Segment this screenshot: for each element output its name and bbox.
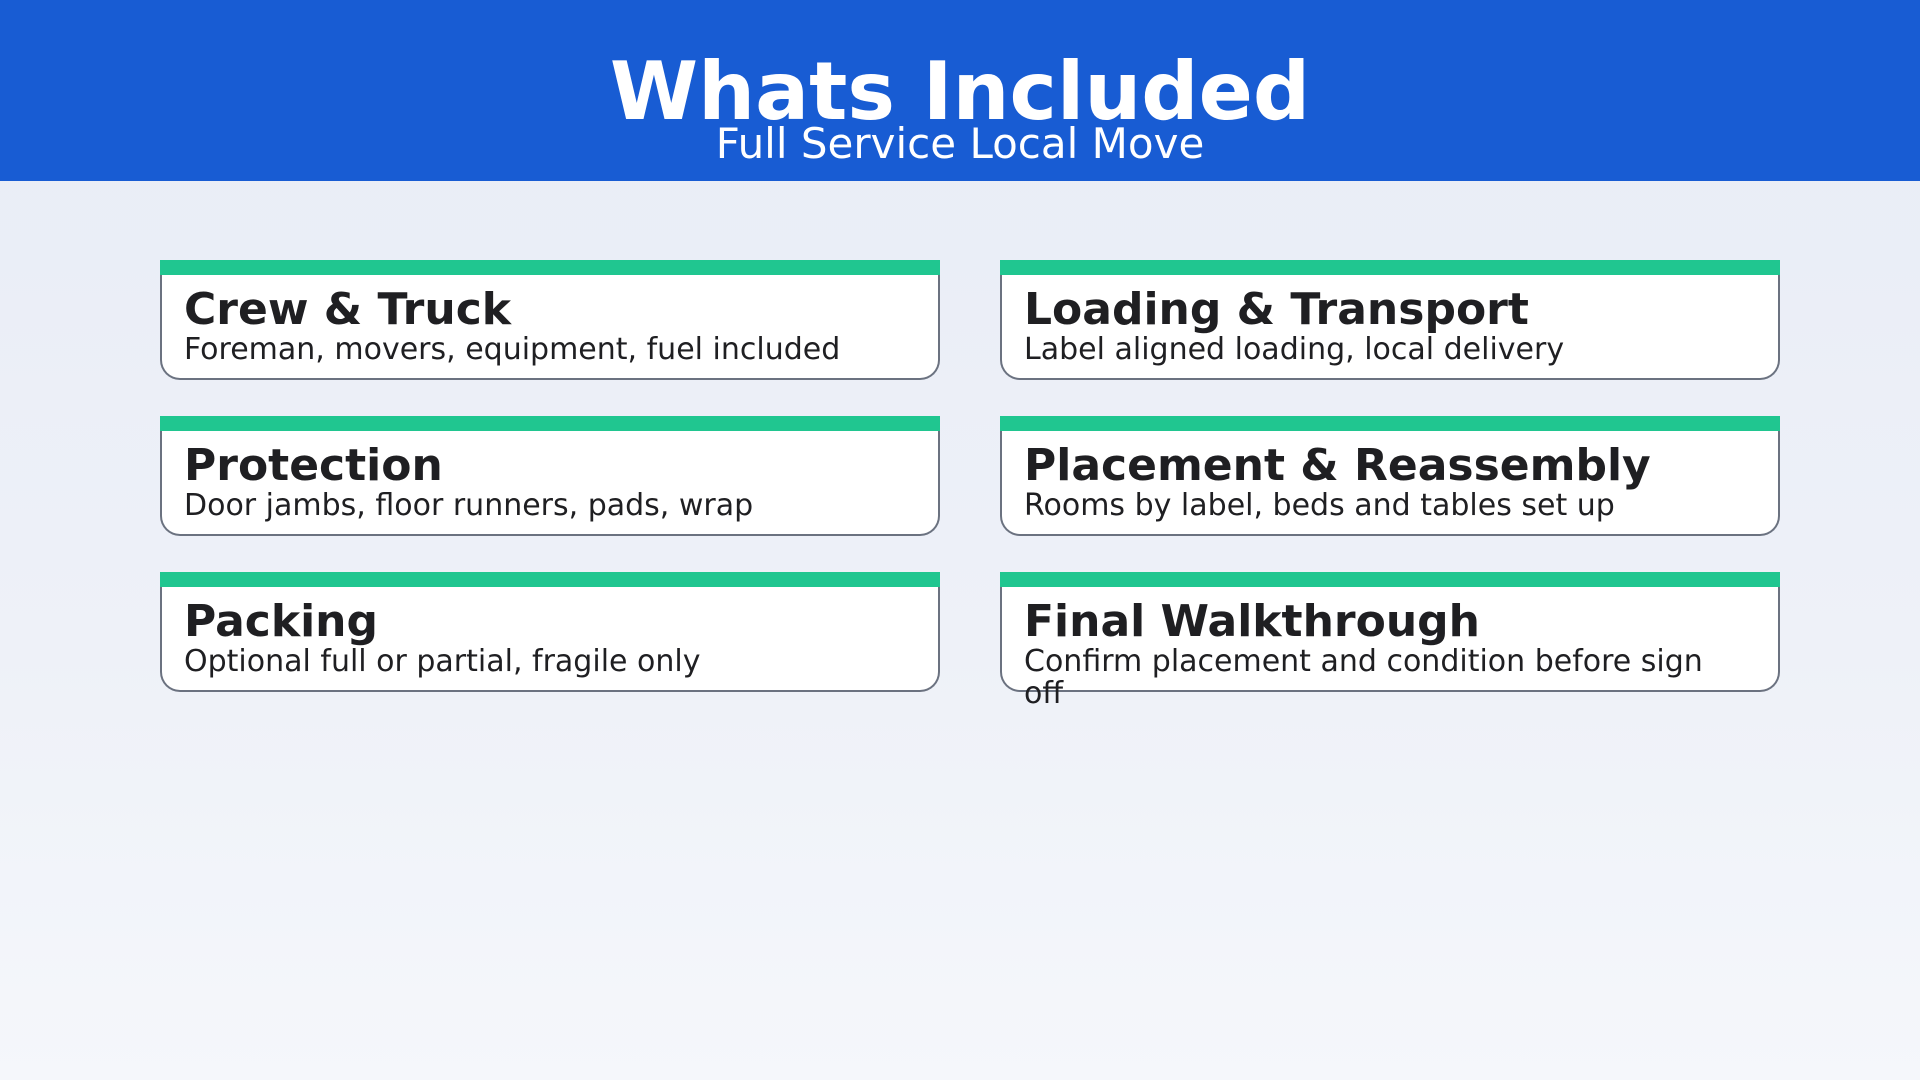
card title: Protection: [184, 440, 443, 491]
card: protection: [160, 416, 940, 536]
card description: Optional full or partial, fragile only: [184, 644, 700, 679]
card: packing: [160, 572, 940, 692]
card title: Packing: [184, 596, 378, 647]
title: Whats Included: [610, 45, 1310, 138]
card: placement & reassembly: [1000, 416, 1780, 536]
card title: Crew & Truck: [184, 284, 511, 335]
card title: Loading & Transport: [1024, 284, 1529, 335]
card title: Placement & Reassembly: [1024, 440, 1651, 491]
card title: Final Walkthrough: [1024, 596, 1480, 647]
card description: Door jambs, floor runners, pads, wrap: [184, 488, 753, 523]
card description: Rooms by label, beds and tables set up: [1024, 488, 1615, 523]
card description: Confirm placement and condition before sign off: [1024, 644, 1703, 711]
card: final walkthrough: [1000, 572, 1780, 692]
card: loading & transport: [1000, 260, 1780, 380]
card description: Label aligned loading, local delivery: [1024, 332, 1564, 367]
subtitle: Full Service Local Move: [716, 119, 1204, 168]
header banner: [0, 0, 1920, 181]
card: crew & truck: [160, 260, 940, 380]
card description: Foreman, movers, equipment, fuel included: [184, 332, 840, 367]
